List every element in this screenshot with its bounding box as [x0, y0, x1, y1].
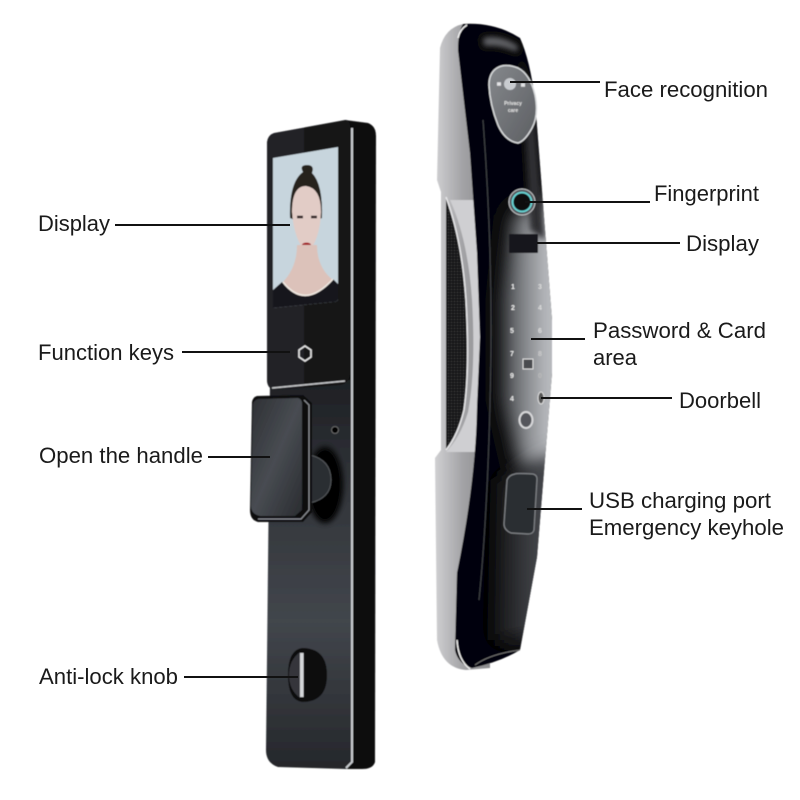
keypad digits: 8: [538, 351, 542, 358]
neckline: [283, 279, 333, 295]
oval caption: Privacy: [504, 101, 522, 107]
label: Open the handle: Open the handle: [39, 443, 203, 468]
label: USB charging port and Emergency keyhole: Emergency keyhole: [589, 515, 784, 540]
panel reflection: [267, 127, 304, 390]
black top: [272, 279, 339, 309]
function key icon: [299, 346, 311, 361]
keypad digits: 1: [511, 284, 515, 291]
keypad digits: 4: [510, 396, 514, 403]
front lock lower plate: [266, 380, 352, 769]
keypad digits: 7: [510, 351, 514, 358]
label: Function keys: Function keys: [38, 340, 174, 365]
side lock: full body assembly: [434, 22, 553, 670]
label: Password and Card area: [531, 318, 766, 370]
lock button: [520, 412, 532, 428]
grey face glow: [502, 190, 570, 470]
label: Face recognition: Face recognition: [604, 77, 768, 102]
sensor ring: [512, 192, 532, 212]
keypad digits: [510, 284, 542, 403]
knob recess: [288, 648, 327, 702]
neck and chest: [284, 244, 332, 295]
body shading: [478, 32, 553, 653]
body curve highlight: [479, 120, 491, 600]
speaker mesh edge: [446, 197, 468, 450]
label: USB charging port and Emergency keyhole: [527, 488, 784, 540]
fingerprint sensor: [509, 189, 535, 215]
keypad digits: 6: [538, 328, 542, 335]
anti-lock knob: [288, 648, 327, 702]
label: USB charging port and Emergency keyhole: USB charging port: [589, 488, 771, 513]
black main body: [455, 24, 552, 668]
display window: [509, 234, 538, 253]
front lock: full front panel assembly: [250, 120, 376, 769]
silver rear body: [435, 24, 490, 670]
top edge highlight: [458, 25, 467, 38]
display screen with portrait: [272, 146, 339, 308]
label: Password and Card area: Password & Card: [593, 318, 766, 343]
knob left half: [289, 652, 300, 698]
upper glass panel: [267, 120, 350, 390]
small hole: [332, 426, 338, 434]
handle: [250, 395, 312, 522]
silver strip right of speaker: [446, 200, 482, 452]
keypad digits: 5: [510, 328, 514, 335]
front lock body side: [345, 120, 376, 769]
keypad digits: 4: [538, 305, 542, 312]
keypad digits: 2: [511, 305, 515, 312]
plate edge highlight: [346, 128, 352, 768]
handle shadow: [307, 447, 343, 523]
face recognition oval: [489, 66, 536, 143]
handle highlight: [258, 400, 309, 519]
USB port cover: [504, 474, 537, 534]
label: Anti-lock knob: Anti-lock knob: [39, 664, 178, 689]
label: Display right: Display: [686, 231, 759, 256]
speaker mesh: [446, 197, 468, 450]
screen background: [270, 145, 340, 310]
label: Fingerprint: Fingerprint: [654, 181, 759, 206]
doorbell button: [538, 392, 544, 404]
sensor bezel: [509, 189, 535, 215]
lower body shade: [495, 450, 560, 640]
oval caption line two: care: [508, 108, 518, 114]
bottom edge highlight: [457, 640, 470, 669]
label: Doorbell: Doorbell: [679, 388, 761, 413]
panel lower trim: [272, 381, 345, 388]
label: Password and Card area: area: [593, 345, 638, 370]
sensor dots: [497, 84, 525, 85]
handle face: [251, 398, 302, 516]
top right edge gloss: [521, 60, 545, 240]
knob bar: [300, 653, 304, 697]
camera lens: [504, 78, 516, 90]
keypad digits: 0: [538, 373, 542, 380]
lips: [302, 242, 312, 246]
bottom reflection: [475, 650, 520, 665]
label: Display left: Display: [38, 211, 110, 236]
eyes: [297, 216, 317, 218]
face: [292, 186, 321, 254]
top gloss: [483, 37, 518, 52]
hair: [290, 165, 322, 222]
keypad digits: 3: [538, 284, 542, 291]
card icon: [523, 359, 533, 369]
keypad digits: 9: [510, 373, 514, 380]
handle neck: [310, 455, 331, 503]
